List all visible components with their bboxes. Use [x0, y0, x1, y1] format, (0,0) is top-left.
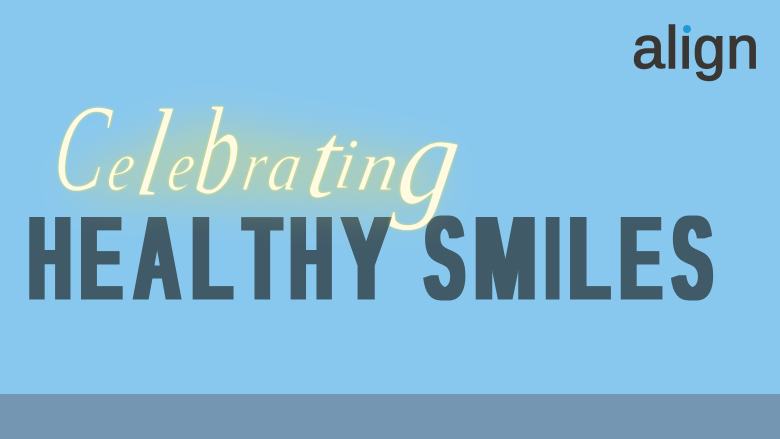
script title: Celebrating: r	[237, 127, 274, 206]
heading: HEALTHY SMILES: H	[290, 192, 332, 325]
script title: Celebrating: i	[329, 123, 363, 204]
heading: HEALTHY SMILES: M	[474, 193, 536, 326]
heading: HEALTHY SMILES: Y	[342, 191, 390, 325]
heading: HEALTHY SMILES: A	[134, 192, 180, 326]
script title: Celebrating: b	[188, 83, 250, 221]
heading: HEALTHY SMILES	[29, 191, 712, 326]
logo: align: align	[632, 15, 760, 81]
script title: Celebrating: t	[299, 99, 354, 221]
script title: Celebrating: l	[128, 83, 180, 222]
script title: Celebrating: C	[46, 79, 118, 217]
logo dot	[680, 21, 694, 34]
script title: Celebrating: g	[388, 87, 472, 231]
heading: HEALTHY SMILES: S	[425, 192, 464, 326]
script title: Celebrating: n	[352, 127, 406, 206]
script title: Celebrating: a	[262, 125, 309, 206]
glow behind script	[70, 120, 440, 210]
script title: Celebrating: e	[102, 127, 142, 206]
bottom band	[0, 394, 780, 439]
heading: HEALTHY SMILES: I	[546, 193, 559, 326]
script title: Celebrating	[46, 79, 472, 231]
script title: Celebrating: e	[162, 127, 202, 206]
heading: HEALTHY SMILES: E	[80, 193, 122, 326]
heading: HEALTHY SMILES: E	[620, 193, 661, 326]
heading: HEALTHY SMILES: H	[29, 192, 71, 325]
heading: HEALTHY SMILES: L	[569, 191, 609, 326]
heading: HEALTHY SMILES: L	[192, 191, 232, 326]
heading: HEALTHY SMILES: T	[244, 192, 281, 326]
heading: HEALTHY SMILES: S	[673, 192, 712, 326]
